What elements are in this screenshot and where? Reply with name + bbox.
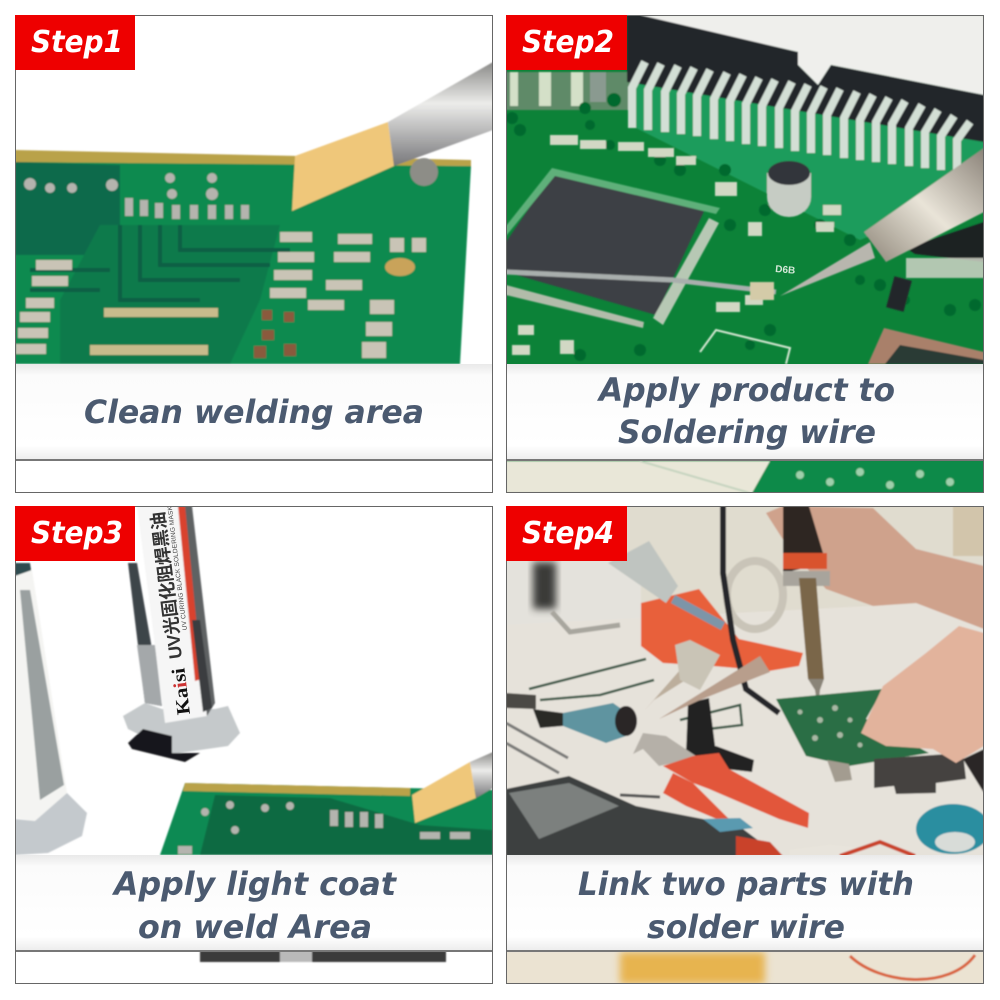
syringe brand text: Kaisi	[168, 667, 195, 716]
step 1 badge: Step1	[31, 25, 123, 60]
step 2 caption: Apply product to	[596, 371, 895, 409]
syringe small text: UV CURING BLACK SOLDERING MASK	[167, 505, 189, 631]
step 2 badge: Step2	[522, 25, 614, 60]
image: soldering on green circuit board	[506, 15, 984, 493]
caption band	[506, 855, 984, 952]
image: syringes and circuit board	[15, 506, 493, 962]
step 3 badge: Step3	[31, 516, 123, 551]
panel: step 2	[506, 15, 984, 493]
step 2 caption: Soldering wire	[618, 413, 876, 451]
step 4 caption	[578, 865, 914, 946]
step 1 caption: Clean welding area	[84, 393, 424, 431]
step 1 badge	[15, 15, 135, 70]
step 3 caption: on weld Area	[138, 908, 372, 946]
step 3 caption	[111, 865, 398, 946]
pcb marking: D6B	[775, 264, 796, 277]
panel: step 1	[16, 62, 492, 461]
syringe label text: UV光固化阻焊黑油	[147, 511, 186, 660]
panel: step 3	[15, 505, 493, 984]
step 3 caption: Apply light coat	[111, 865, 398, 903]
image: workbench with soldering tools	[506, 506, 990, 984]
step 3 badge	[15, 506, 135, 561]
step 4 badge	[506, 506, 627, 561]
caption band	[15, 364, 493, 461]
caption band	[15, 855, 493, 952]
step 2 badge	[506, 15, 627, 70]
step 2 caption	[596, 371, 895, 451]
caption band	[506, 364, 984, 461]
step 4 badge: Step4	[522, 516, 614, 551]
panel: step 4	[506, 506, 990, 984]
step 4 caption: solder wire	[647, 908, 845, 946]
image: circuit board being brushed	[15, 62, 493, 364]
step 4 caption: Link two parts with	[578, 865, 914, 903]
